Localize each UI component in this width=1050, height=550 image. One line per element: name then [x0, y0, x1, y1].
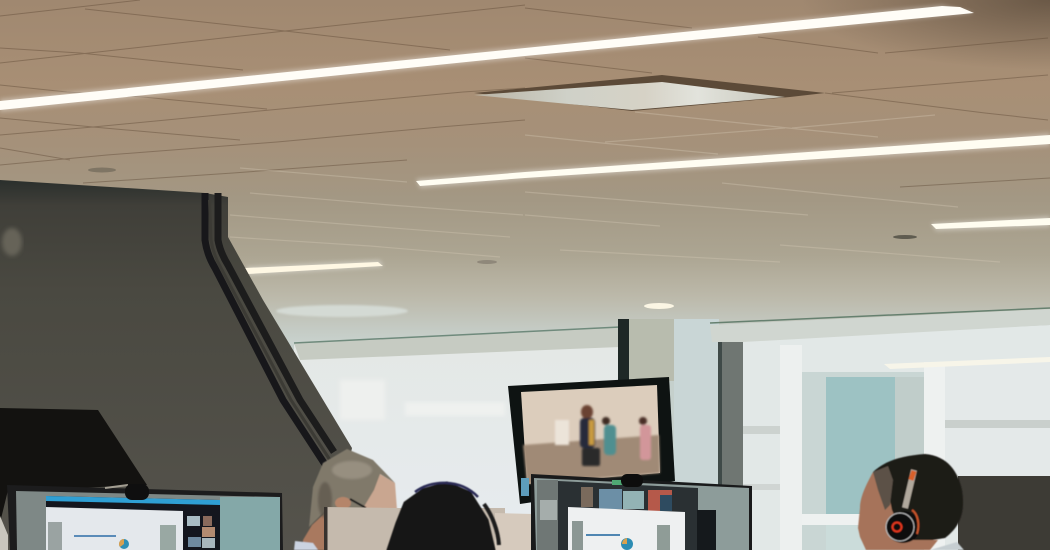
ceiling vent — [474, 75, 825, 111]
man wearing headset — [858, 454, 964, 550]
wall-mounted TV with video call — [508, 377, 675, 504]
ceiling — [0, 0, 1050, 345]
monitor center — [531, 474, 752, 550]
monitor left — [7, 485, 283, 550]
woman with dark hair and headset — [388, 483, 499, 550]
right side windows — [710, 308, 1050, 550]
small recessed ceiling lights — [88, 168, 917, 317]
webcam on left monitor — [105, 484, 149, 500]
ceiling light strips — [0, 5, 1050, 275]
man with grey hair — [294, 449, 397, 550]
column — [618, 319, 743, 489]
drain pipe on wall — [205, 193, 334, 466]
concrete wall — [0, 180, 352, 550]
dark cubicle partition right — [958, 476, 1050, 550]
dark shadow opening on wall — [0, 408, 147, 550]
webcam on center monitor — [612, 474, 643, 487]
back windows — [294, 327, 620, 520]
cubicle partition center — [324, 507, 532, 550]
